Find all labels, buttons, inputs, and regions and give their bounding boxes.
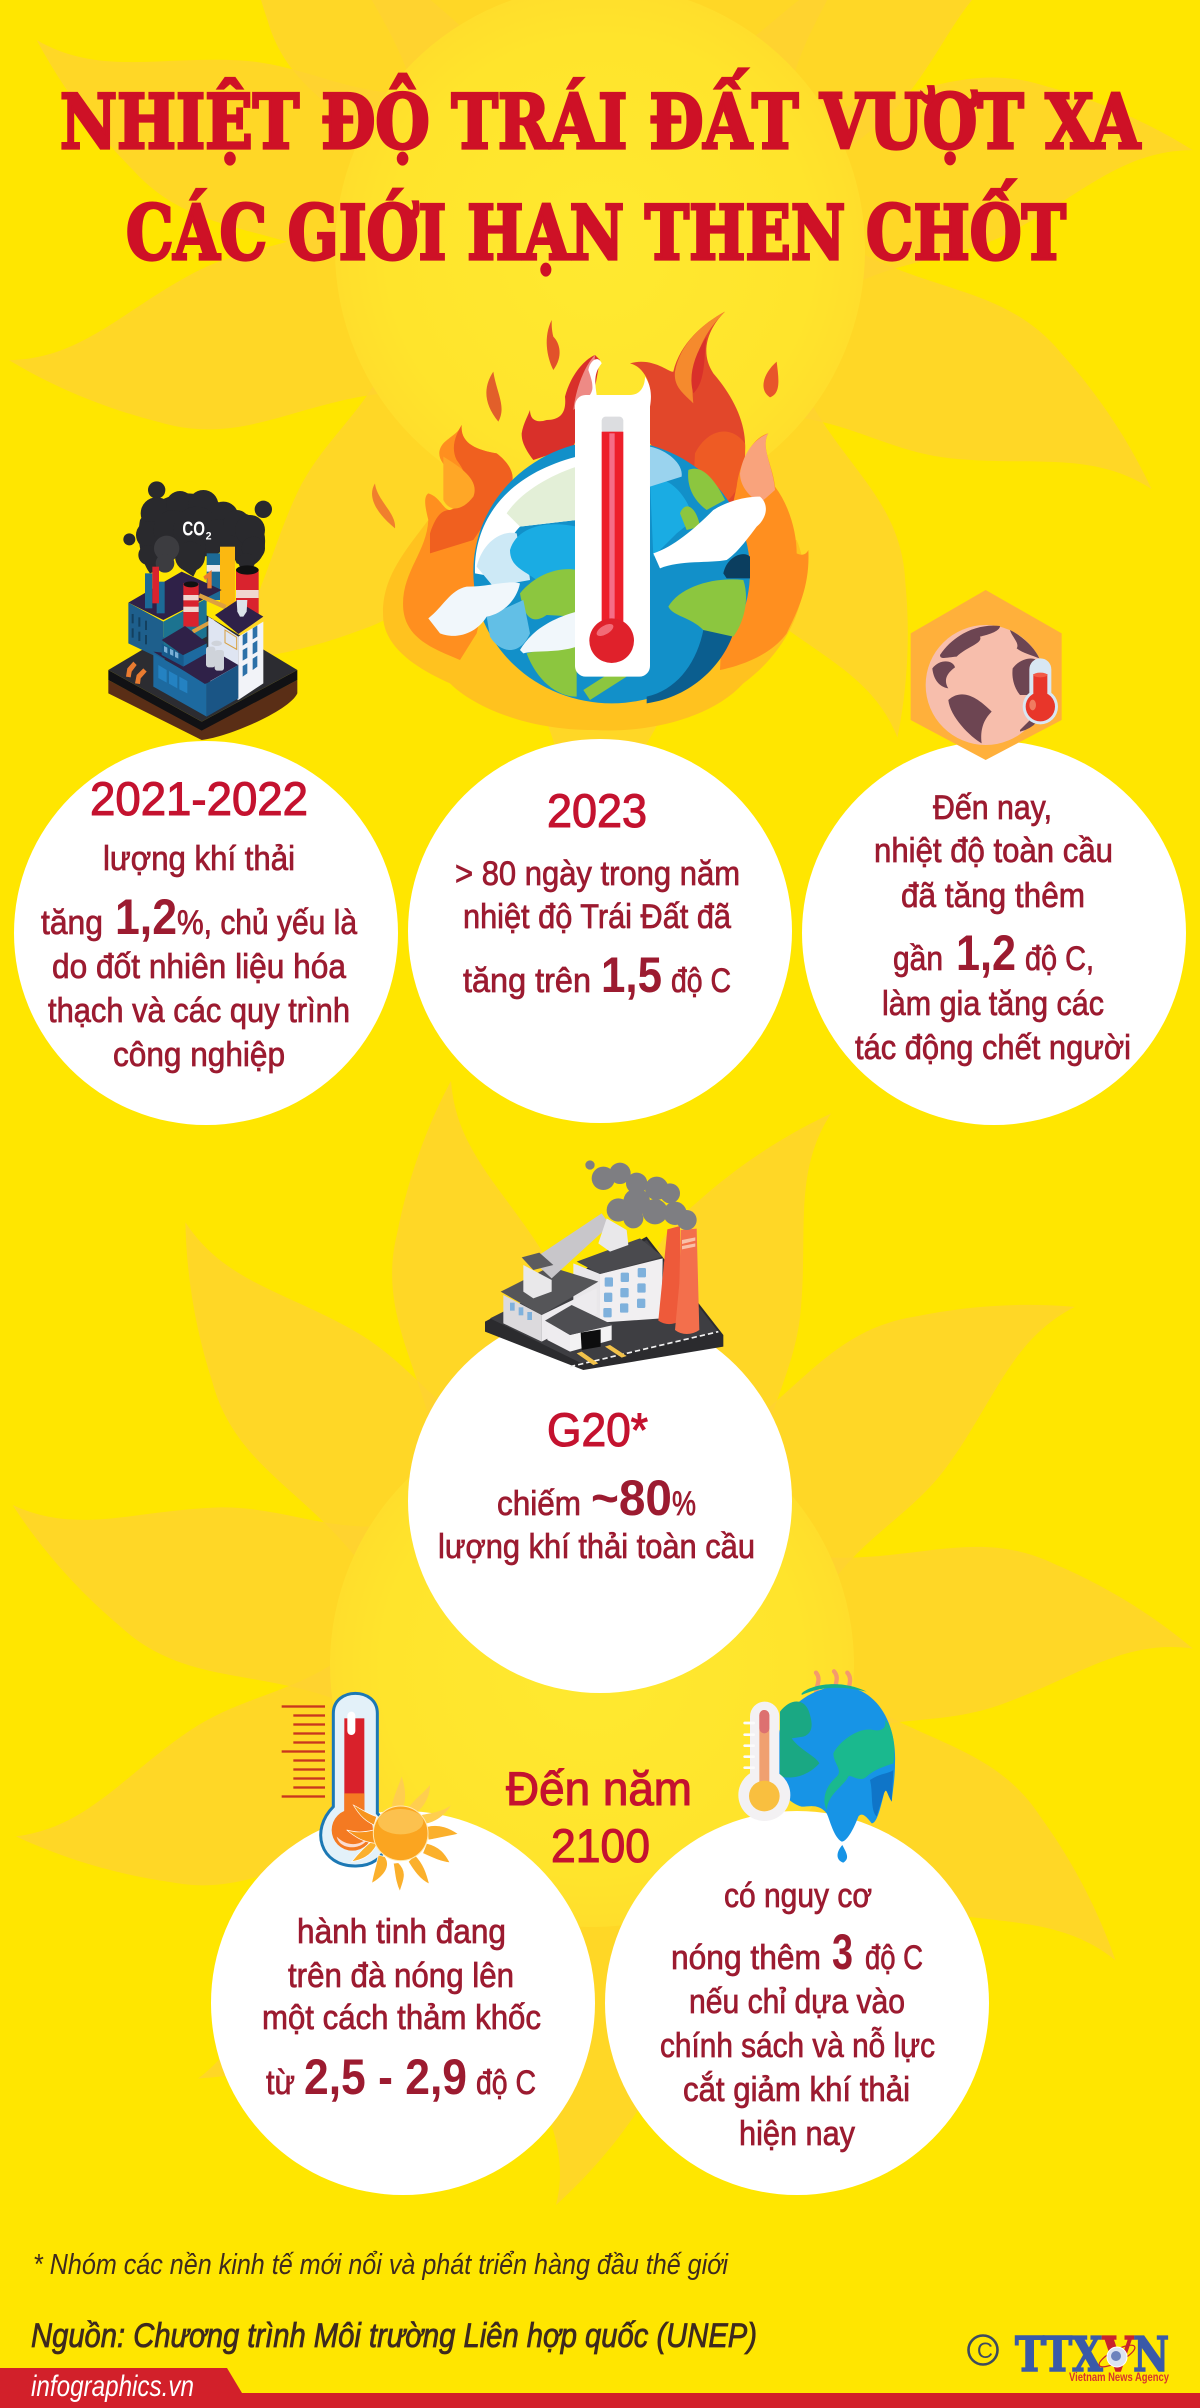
icon: globe in hexagon with thermometer — [911, 590, 1062, 760]
footer bar — [0, 2368, 1200, 2408]
text: circle 3 body: 1,2 — [956, 925, 1016, 981]
text: circle 1 body: thạch và các quy trình — [48, 992, 350, 1030]
text: circle 3 body: gần — [893, 940, 943, 978]
panel: G20 circle — [408, 1309, 792, 1693]
text: circle 3 body: độ C, — [1025, 940, 1094, 978]
text: circle 1 body: do đốt nhiên liệu hóa — [52, 948, 346, 986]
text: circle 2 body: 1,5 — [601, 947, 662, 1003]
text: circle 3 body: làm gia tăng các — [882, 985, 1104, 1023]
title — [60, 69, 1142, 277]
text: circle 1 body: 1,2 — [115, 889, 177, 945]
source: Nguồn: Chương trình Môi trường Liên hợp quốc (UNEP) — [31, 2317, 757, 2355]
logo: copyright and TTXVN: Vietnam News Agency — [1069, 2370, 1169, 2384]
background sun: bottom — [0, 1062, 1198, 2205]
illustration: burning globe with thermometer — [372, 312, 809, 730]
text: circle 2 body: độ C — [671, 962, 731, 1000]
text: circle 2 body: > 80 ngày trong năm — [455, 855, 740, 893]
icon: factory with CO2 smoke: 2 — [206, 530, 212, 542]
panel: bottom right circle — [605, 1811, 989, 2195]
text: circle 3 body: Đến nay, — [933, 789, 1052, 827]
text: circle 1 body — [41, 840, 357, 1074]
text: G20 body: ~80 — [591, 1470, 672, 1526]
text: bottom right body — [660, 1877, 935, 2153]
text: bottom left body: từ — [266, 2064, 295, 2102]
text: bottom left body — [262, 1913, 541, 2105]
text: G20 body: lượng khí thải toàn cầu — [438, 1528, 755, 1566]
text: circle 3 body: đã tăng thêm — [901, 877, 1085, 915]
heading: Đến năm 2100 — [506, 1762, 692, 1872]
text: circle 1 body: lượng khí thải — [103, 840, 295, 878]
text: G20 body — [438, 1470, 755, 1566]
logo: copyright and TTXVN: C — [977, 2338, 993, 2363]
footnote: * Nhóm các nền kinh tế mới nổi và phát triển hàng đầu thế giới — [33, 2249, 729, 2281]
text: circle 3 body: nhiệt độ toàn cầu — [874, 832, 1113, 870]
text: circle 2 body — [455, 855, 740, 1003]
panel: circle 1 — [14, 741, 398, 1125]
text: bottom right body: nóng thêm — [671, 1939, 821, 1977]
text: circle 2 body: nhiệt độ Trái Đất đã — [463, 898, 731, 936]
heading: 2021-2022: 2021-2022 — [90, 772, 308, 825]
text: G20 body: % — [672, 1485, 696, 1523]
text: bottom left body: trên đà nóng lên — [288, 1957, 514, 1995]
text: circle 1 body: %, chủ yếu là — [177, 904, 357, 942]
text: circle 3 body: tác động chết người — [855, 1029, 1131, 1067]
text: bottom left body: độ C — [476, 2064, 536, 2102]
text: bottom right body: 3 — [832, 1924, 853, 1980]
text: circle 3 body — [855, 789, 1131, 1067]
text: G20 body: chiếm — [497, 1485, 581, 1523]
text: bottom left body: 2,5 - 2,9 — [304, 2049, 467, 2105]
text: bottom right body: nếu chỉ dựa vào — [689, 1983, 905, 2021]
heading: Đến năm 2100: Đến năm — [506, 1762, 692, 1815]
panel: circle 2 — [408, 739, 792, 1123]
panel: bottom left circle — [211, 1811, 595, 2195]
text: bottom left body: hành tinh đang — [297, 1913, 506, 1951]
icon: melting globe with thermometer — [738, 1671, 895, 1863]
text: bottom right body: độ C — [865, 1939, 923, 1977]
text: CO2: CO — [182, 518, 205, 540]
text: circle 1 body: công nghiệp — [113, 1036, 285, 1074]
icon: thermometer and sun — [282, 1693, 458, 1892]
text: bottom right body: hiện nay — [739, 2115, 855, 2153]
heading: Đến năm 2100: 2100 — [551, 1819, 650, 1872]
heading: 2023: 2023 — [547, 784, 647, 837]
text: bottom right body: chính sách và nỗ lực — [660, 2027, 935, 2065]
background sun: top — [0, 0, 1200, 850]
text: circle 1 body: tăng — [41, 904, 103, 942]
icon: factory with CO2 smoke — [108, 481, 297, 740]
text: circle 2 body: tăng trên — [463, 962, 591, 1000]
text: website: infographics.vn — [31, 2370, 194, 2403]
text: bottom right body: cắt giảm khí thải — [683, 2071, 910, 2109]
icon: grey factory with red chimneys — [485, 1160, 723, 1370]
logo: copyright and TTXVN: TTXVN — [1015, 2327, 1169, 2383]
text: bottom left body: một cách thảm khốc — [262, 1999, 541, 2037]
heading: G20: G20* — [547, 1403, 648, 1456]
panel: circle 3 — [802, 741, 1186, 1125]
text: bottom right body: có nguy cơ — [724, 1877, 872, 1915]
